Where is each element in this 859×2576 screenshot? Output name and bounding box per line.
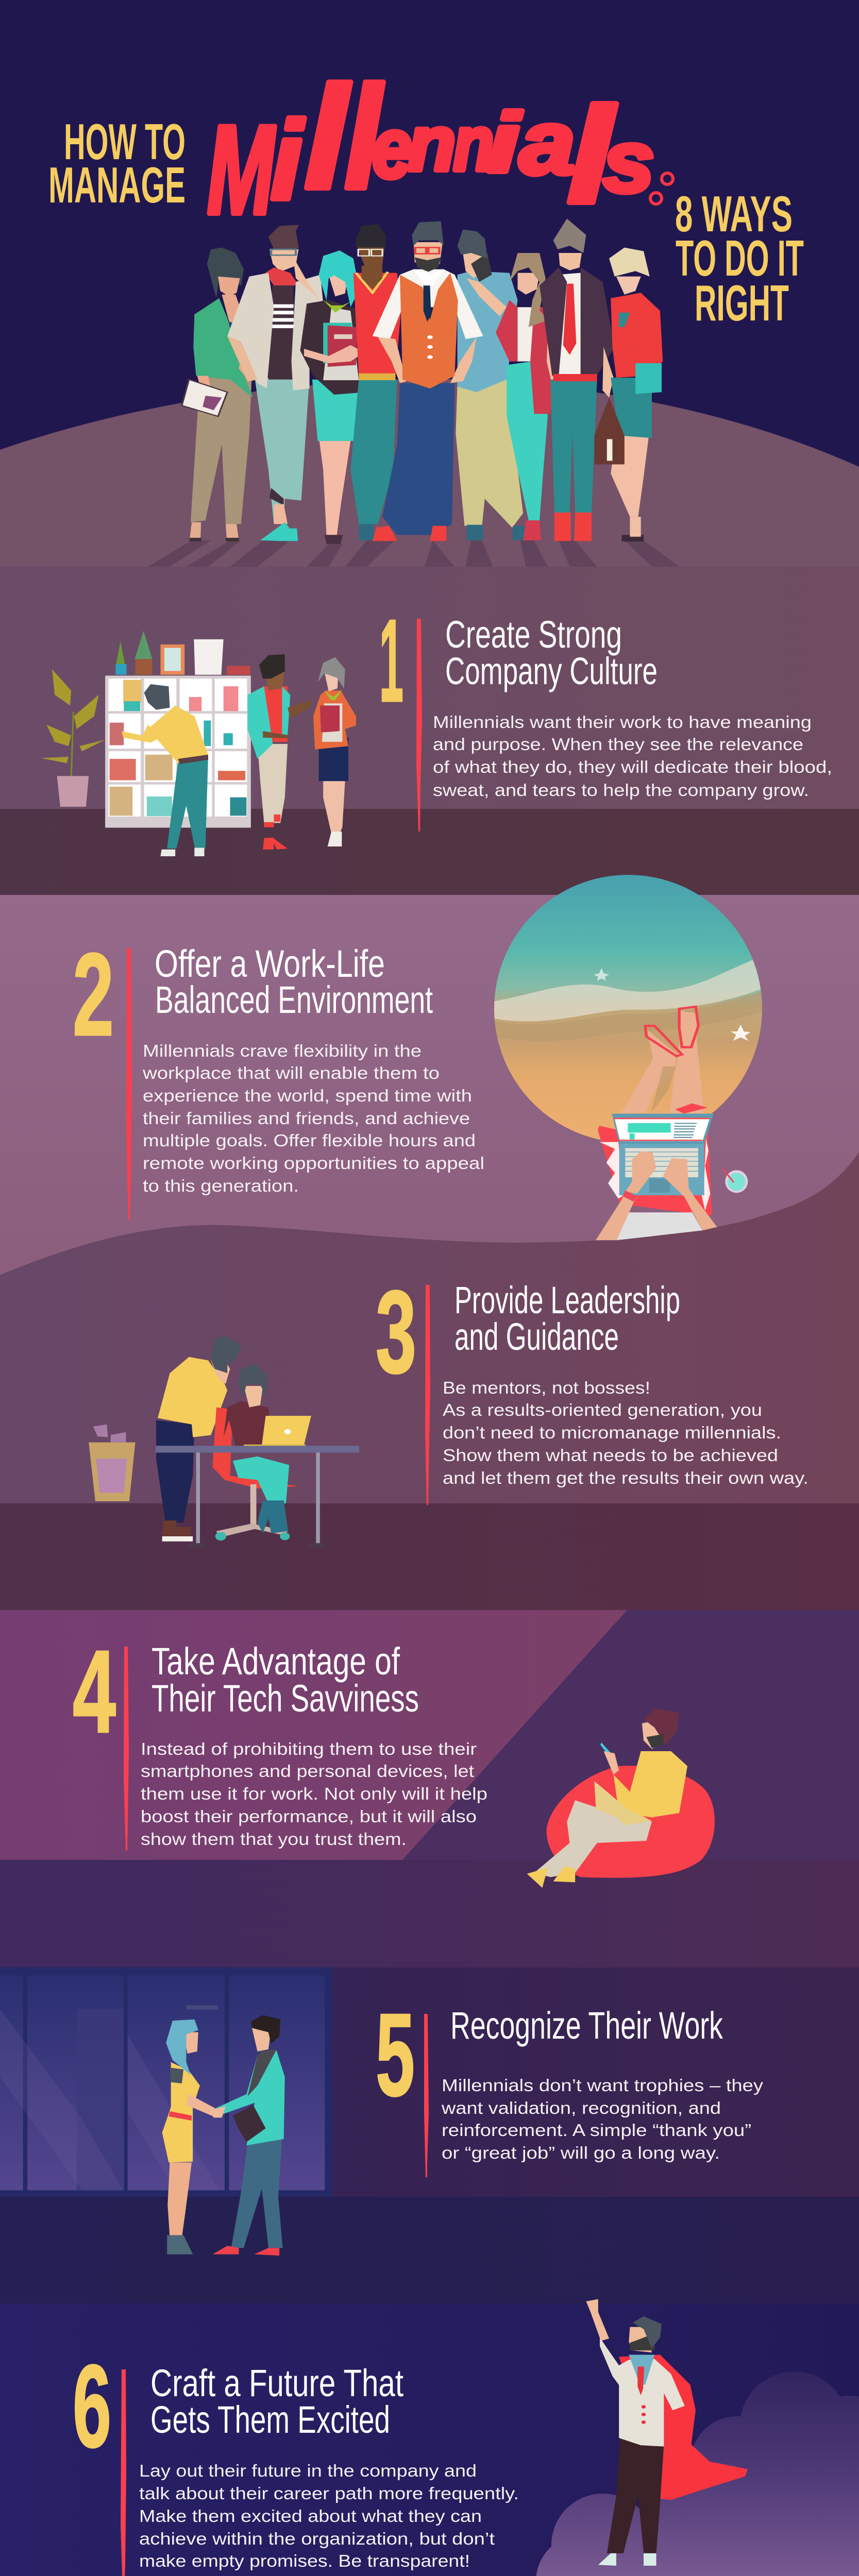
section 6 panel background <box>0 2303 859 2576</box>
title: millennials script: l <box>567 79 616 232</box>
title: millennials script: l <box>304 56 351 219</box>
buttons <box>642 2405 646 2424</box>
hands and arms <box>596 1151 717 1240</box>
body: Be mentors, not bosses! <box>443 1378 650 1397</box>
body: Instead of prohibiting them to use their <box>141 1739 477 1758</box>
body: or “great job” will go a long way. <box>442 2143 720 2162</box>
body: to this generation. <box>143 1176 299 1195</box>
title: how to manage: MANAGE <box>48 157 186 213</box>
laptop <box>594 1781 652 1825</box>
number 4: 4 <box>73 1626 116 1757</box>
body: Make them excited about what they can <box>139 2506 482 2526</box>
heading: Company Culture <box>445 650 658 692</box>
legs <box>619 1011 704 1115</box>
section 6: purple cloud <box>536 2371 859 2576</box>
body: Show them what needs to be achieved <box>443 1446 778 1465</box>
section 6: text block <box>73 2341 519 2576</box>
heading <box>445 613 658 692</box>
sweater <box>614 1751 687 1817</box>
raised arm and fist <box>586 2299 609 2341</box>
person: beige jacket man <box>227 225 323 541</box>
illustration: superhero manager <box>586 2299 748 2566</box>
person: blue shirt man <box>456 229 526 540</box>
heading: Craft a Future That <box>150 2362 403 2404</box>
illustration: woman with laptop on beach <box>596 1056 748 1240</box>
woman with grey hair holding book <box>313 657 356 846</box>
number 3: 3 <box>376 1267 416 1398</box>
body: remote working opportunities to appeal <box>143 1154 484 1173</box>
title: millennials script <box>207 56 673 240</box>
background: header night sky <box>0 0 859 567</box>
starfish <box>731 1025 750 1041</box>
man reaching for book <box>122 684 208 856</box>
body: talk about their career path more frequently. <box>139 2484 519 2503</box>
title: 8 ways to do it right: RIGHT <box>695 275 789 331</box>
heading: Balanced Environment <box>155 978 433 1021</box>
title: how to manage: HOW TO <box>64 113 186 170</box>
chair <box>212 1408 298 1540</box>
title <box>48 56 804 331</box>
shorts and shirt <box>598 1104 712 1216</box>
body <box>443 1378 809 1487</box>
woman at laptop <box>224 1364 289 1533</box>
section 4 diagonal dark shape <box>402 1610 859 1860</box>
red brush divider <box>124 1647 129 1851</box>
legs and trousers <box>534 1800 652 1877</box>
trousers <box>607 2438 664 2553</box>
red brush divider <box>121 2369 126 2576</box>
section 2 panel background <box>0 895 859 1275</box>
heading: Recognize Their Work <box>450 2004 723 2047</box>
number 6: 6 <box>73 2341 111 2472</box>
body: workplace that will enable them to <box>142 1063 440 1082</box>
heading: Take Advantage of <box>151 1640 400 1683</box>
title: millennials script: s <box>603 113 654 211</box>
vest and sleeves <box>600 2337 685 2447</box>
heading: Their Tech Savviness <box>151 1677 419 1720</box>
title: millennials script: a <box>519 93 575 193</box>
red brush divider <box>425 1285 430 1505</box>
section 1 floor <box>0 809 859 895</box>
title: millennials script: e <box>372 100 412 195</box>
person: teal hair woman <box>300 250 365 544</box>
body: As a results-oriented generation, you <box>443 1400 762 1419</box>
section 5 panel background <box>0 1968 859 2197</box>
title: millennials script: i <box>487 95 522 190</box>
heading: Create Strong <box>445 613 622 656</box>
illustration: legs and flip-flops on the sand <box>594 968 750 1115</box>
section 4 floor <box>0 1860 859 1968</box>
collar and tie <box>629 2354 654 2384</box>
woman in yellow dress <box>162 2020 219 2255</box>
person: man in red shirt <box>350 224 401 540</box>
heading: Provide Leadership <box>454 1279 680 1321</box>
legs <box>622 1056 703 1113</box>
body: make empty promises. Be transparent! <box>139 2551 470 2570</box>
heading: and Guidance <box>454 1315 619 1358</box>
illustration: man on red beanbag <box>527 1708 715 1888</box>
man in yellow sweater <box>156 1335 241 1541</box>
body <box>142 1041 484 1195</box>
white bottoms <box>617 1212 702 1240</box>
red brush divider <box>416 619 422 832</box>
office window <box>0 1968 332 2197</box>
head and beanie <box>642 1719 663 1749</box>
section 5: text block <box>376 1990 764 2177</box>
body: achieve within the organization, but don’t <box>139 2529 495 2548</box>
body <box>441 2076 764 2162</box>
heading: Offer a Work-Life <box>155 942 385 985</box>
phone and hand <box>600 1742 616 1760</box>
section 1: text block: 1 <box>379 596 403 726</box>
body: and let them get the results their own way. <box>443 1468 809 1487</box>
body: them use it for work. Not only will it help <box>141 1784 487 1803</box>
body <box>139 2461 519 2570</box>
body: of what they do, they will dedicate their blood, <box>433 757 832 776</box>
body: Lay out their future in the company and <box>139 2461 477 2480</box>
wastebasket <box>89 1425 136 1501</box>
person: woman in red cardigan <box>496 253 563 540</box>
body: boost their performance, but it will also <box>141 1807 477 1826</box>
illustration: group of nine millennials <box>148 218 679 567</box>
desk and laptop <box>156 1416 359 1548</box>
shoes <box>527 1867 575 1888</box>
heading: Gets Them Excited <box>150 2398 390 2441</box>
red cape <box>619 2354 748 2500</box>
section 4: text block <box>73 1626 487 1851</box>
person: tall man in dark suit <box>540 218 615 541</box>
title: millennials script: l <box>344 56 384 219</box>
title: how to manage <box>48 113 186 213</box>
body: Millennials want their work to have meaning <box>433 713 812 732</box>
body: reinforcement. A simple “thank you” <box>442 2121 751 2140</box>
body: Millennials crave flexibility in the <box>143 1041 422 1060</box>
body: experience the world, spend time with <box>143 1086 472 1105</box>
body <box>141 1739 487 1849</box>
shelf-top items <box>115 631 250 675</box>
section 1 panel background <box>0 567 859 809</box>
person: central vest man <box>373 221 483 541</box>
body: don’t need to micromanage millennials. <box>443 1423 781 1442</box>
illustration: mentor and woman at desk <box>89 1335 359 1548</box>
section 4 panel background <box>0 1610 859 1860</box>
heading <box>155 942 433 1021</box>
bookshelf <box>105 675 251 828</box>
beanbag <box>547 1766 715 1878</box>
person: green jacket woman <box>182 248 258 541</box>
man in teal cardigan <box>247 654 312 850</box>
body <box>433 713 832 800</box>
body: show them that you trust them. <box>141 1829 407 1849</box>
section 1: text block <box>379 596 832 832</box>
section 2: text block <box>73 929 484 1220</box>
body: want validation, recognition, and <box>441 2098 721 2117</box>
section 5 floor <box>0 2197 859 2303</box>
body: sweat, and tears to help the company grow. <box>433 781 809 800</box>
red brush divider <box>126 948 132 1220</box>
heading <box>151 1640 419 1720</box>
red brush divider <box>424 2014 429 2177</box>
title: 8 ways to do it right <box>675 185 804 331</box>
shoreline foam <box>494 960 761 1022</box>
heading <box>454 1279 680 1358</box>
body: their families and friends, and achieve <box>143 1109 470 1128</box>
body: smartphones and personal devices, let <box>141 1761 474 1781</box>
illustration: office bookshelf and colleagues <box>41 631 356 856</box>
title: millennials script: i <box>271 98 305 223</box>
number 2: 2 <box>73 929 114 1060</box>
flip-flops <box>645 1007 698 1056</box>
heading <box>150 2362 403 2441</box>
body: Millennials don’t want trophies – they <box>442 2076 764 2095</box>
head and hair <box>629 2327 652 2352</box>
shoes <box>598 2553 656 2566</box>
section 2: beach circle <box>490 871 768 1149</box>
number 5: 5 <box>376 1990 415 2121</box>
illustration: section 5 window and handshake <box>0 1968 332 2256</box>
section 3 panel background <box>0 1152 859 1503</box>
person: blonde woman in red jacket <box>594 248 663 541</box>
background: header hill <box>0 379 859 567</box>
drink <box>723 1168 748 1193</box>
title: millennials script: M <box>207 99 276 240</box>
title: millennials script: n <box>453 100 494 187</box>
plant <box>41 669 105 807</box>
title: millennials script: n <box>408 100 456 187</box>
laptop <box>612 1114 714 1195</box>
section 3: text block <box>376 1267 809 1505</box>
title: 8 ways to do it right: 8 WAYS <box>675 185 793 242</box>
floor shadows <box>148 540 679 567</box>
body: and purpose. When they see the relevance <box>433 735 803 754</box>
body: multiple goals. Offer flexible hours and <box>143 1131 476 1150</box>
section 3 floor <box>0 1503 859 1610</box>
man in teal shirt <box>210 2015 285 2256</box>
